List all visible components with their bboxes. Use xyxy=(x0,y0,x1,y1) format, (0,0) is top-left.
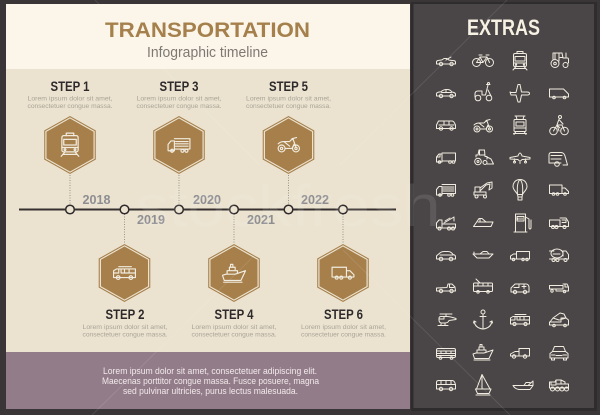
step 2 connector xyxy=(124,214,126,244)
step 1 connector xyxy=(69,175,71,205)
icon: crane truck xyxy=(436,217,456,230)
icon: sailboat xyxy=(476,374,491,395)
footer text xyxy=(102,366,320,396)
year labels: 2021 xyxy=(247,213,275,227)
icon: car front xyxy=(550,346,568,360)
footer text: Maecenas porttitor congue massa. Fusce posuere, magna xyxy=(102,376,320,386)
icon: suv xyxy=(436,252,456,261)
step 2 text line 2: consectetuer congue massa. xyxy=(82,332,168,338)
icon: cement mixer xyxy=(550,249,568,262)
step 2 heading: STEP 2 xyxy=(106,307,144,322)
icon: bulldozer xyxy=(475,150,494,165)
icon: small truck xyxy=(510,348,530,358)
icon: coach bus xyxy=(436,348,456,359)
footer band xyxy=(6,352,410,409)
step 5 heading: STEP 5 xyxy=(269,79,308,94)
step 5 connector xyxy=(288,175,290,205)
step 4 text: Lorem ipsum dolor sit amet, xyxy=(192,324,277,331)
icon: pickup xyxy=(436,284,456,293)
step 3 text line 2: consectetuer congue massa. xyxy=(136,103,222,110)
step 2 text: Lorem ipsum dolor sit amet, xyxy=(82,324,168,331)
watermark: stockfresh xyxy=(136,174,440,239)
icon: minivan xyxy=(436,121,456,130)
icon: anchor xyxy=(474,310,492,329)
icon: ambulance xyxy=(511,284,529,294)
title: TRANSPORTATION xyxy=(105,18,310,42)
icon: hot air balloon xyxy=(513,180,527,200)
icon: semi truck xyxy=(510,252,530,261)
subtitle: Infographic timeline xyxy=(147,44,268,61)
icon: bicycle xyxy=(472,55,494,66)
icon: flatbed truck xyxy=(550,284,568,293)
step 6 connector xyxy=(342,214,344,244)
step 4 heading: STEP 4 xyxy=(214,307,254,322)
icon: heavy truck xyxy=(550,380,568,391)
icon: ship xyxy=(222,264,246,282)
year labels: 2018 xyxy=(82,193,111,207)
footer text: sed pulvinar ultricies, purus lectus malesuada. xyxy=(123,386,298,396)
year labels xyxy=(82,193,329,227)
step 3 heading: STEP 3 xyxy=(160,79,199,94)
icon: motorcycle xyxy=(278,138,299,152)
step 5 hexagon xyxy=(263,116,314,174)
icon: lorry xyxy=(332,267,354,279)
icon: tractor xyxy=(551,53,568,68)
step 1 heading: STEP 1 xyxy=(50,79,90,94)
step 4 xyxy=(192,214,277,338)
step 5 text line 2: consectetuer congue massa. xyxy=(246,103,331,110)
icon: airplane xyxy=(510,84,530,102)
step 6 xyxy=(301,214,386,338)
step 3 hexagon xyxy=(153,116,205,174)
icon: cruise ship xyxy=(473,344,493,360)
icon: plane front xyxy=(510,153,530,164)
icon: yacht xyxy=(474,218,493,226)
icon: van xyxy=(550,89,568,99)
step 6 heading: STEP 6 xyxy=(324,307,363,322)
step 1 hexagon xyxy=(44,116,96,174)
icon: car xyxy=(436,90,456,98)
timeline body background xyxy=(6,69,410,352)
panel: timeline xyxy=(6,4,410,409)
year labels: 2022 xyxy=(301,193,329,207)
header band xyxy=(6,4,410,69)
icon: motorcycle xyxy=(474,120,492,132)
step 6 text: Lorem ipsum dolor sit amet, xyxy=(301,324,386,331)
step 1 xyxy=(28,79,113,205)
icon: truck xyxy=(168,139,190,152)
icon: tram xyxy=(514,116,526,134)
step 5 xyxy=(246,79,331,205)
icon: fire truck xyxy=(114,267,135,279)
step 3 connector xyxy=(178,175,180,205)
year labels: 2019 xyxy=(137,213,165,227)
timeline axis xyxy=(19,205,396,214)
step 2 hexagon xyxy=(99,244,150,302)
icon: caravan xyxy=(549,152,568,166)
icon: delivery truck xyxy=(550,218,568,228)
icon: tram xyxy=(61,133,79,156)
icon: excavator xyxy=(474,182,492,198)
year labels: 2020 xyxy=(193,193,221,207)
step 6 text line 2: consectetuer congue massa. xyxy=(301,332,386,338)
icon: cyclist xyxy=(550,116,568,135)
step 1 text line 2: consectetuer congue massa. xyxy=(28,103,113,110)
icon: speedboat xyxy=(473,252,493,258)
icon: dump truck xyxy=(550,313,568,327)
step 5 text: Lorem ipsum dolor sit amet, xyxy=(246,96,331,102)
panel: extras xyxy=(411,2,597,411)
icon: fire truck xyxy=(510,314,530,326)
icon: lorry xyxy=(550,185,568,195)
icon: tank truck xyxy=(436,153,456,163)
icon: fuel pump xyxy=(514,214,531,232)
step 6 hexagon xyxy=(317,244,369,302)
step 4 text line 2: consectetuer congue massa. xyxy=(192,332,277,338)
step 1 text: Lorem ipsum dolor sit amet, xyxy=(28,96,113,102)
icon: convertible xyxy=(436,57,456,66)
step 3 text: Lorem ipsum dolor sit amet, xyxy=(136,96,222,102)
step 4 hexagon xyxy=(208,244,260,302)
step 4 connector xyxy=(233,214,235,244)
extras heading: EXTRAS xyxy=(467,15,540,40)
step 2 xyxy=(82,214,168,338)
step 3 xyxy=(136,79,222,205)
icon: minibus xyxy=(436,380,456,391)
icon: scooter xyxy=(475,82,492,101)
icon: train xyxy=(513,52,527,70)
footer text: Lorem ipsum dolor sit amet, consectetuer adipiscing elit. xyxy=(103,366,317,376)
icon: motor boat xyxy=(513,381,533,390)
icon: helicopter xyxy=(438,314,456,326)
icon: trolleybus xyxy=(474,279,492,293)
icon: box truck xyxy=(436,184,456,196)
